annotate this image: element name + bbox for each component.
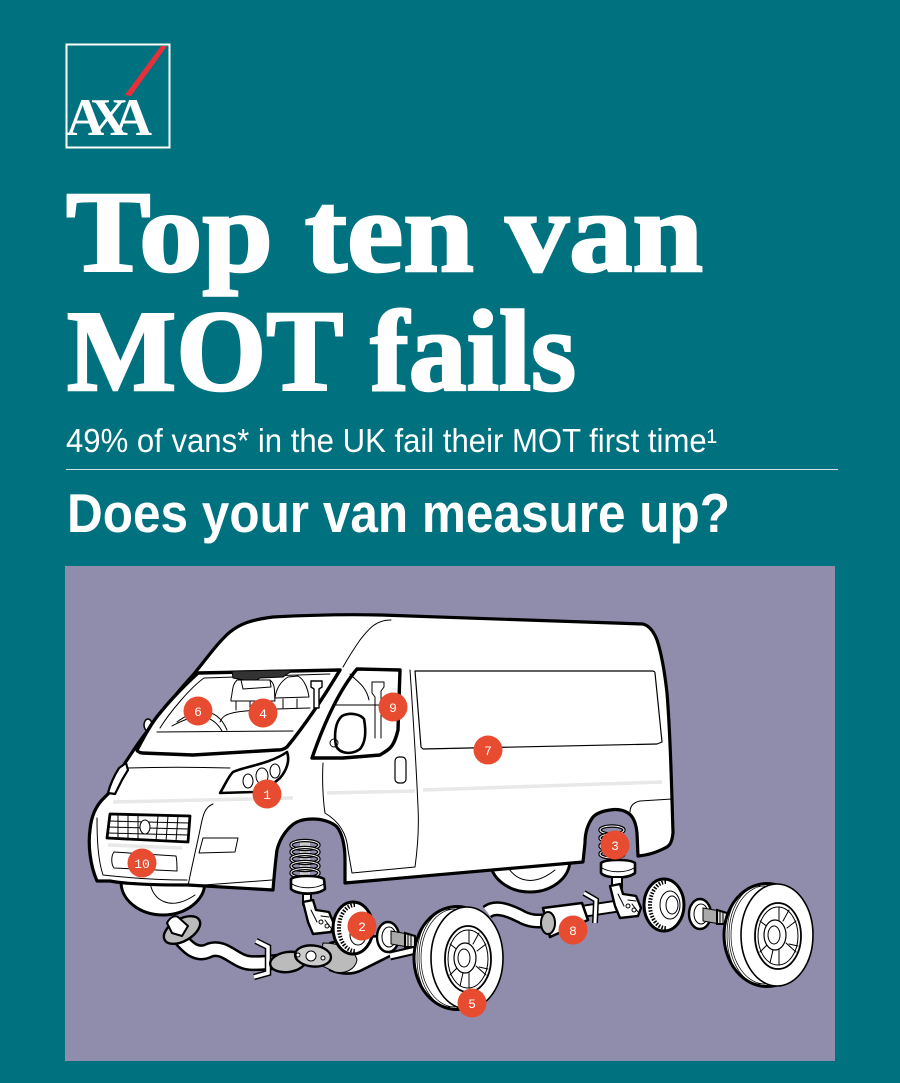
heading: does your van measure up: Does your van measure up?	[67, 482, 730, 544]
badge 8	[558, 916, 588, 944]
front suspension	[291, 840, 334, 934]
badge 9	[378, 692, 408, 722]
front hanger	[254, 941, 268, 977]
headlight	[220, 752, 288, 793]
badge 2	[348, 912, 376, 940]
side indicator	[108, 763, 128, 794]
badge 3: 3	[611, 839, 619, 854]
badge 8: 8	[569, 924, 577, 939]
catalytic converter	[330, 936, 392, 974]
front coil spring	[291, 840, 319, 878]
front pipe	[178, 936, 295, 963]
badge 10: 10	[134, 857, 150, 872]
rear suspension	[600, 826, 641, 918]
door lines	[323, 620, 418, 873]
rear bumper	[630, 799, 672, 812]
rear hub	[689, 899, 727, 929]
rear wheel of van	[490, 828, 570, 892]
title: MOT fails	[67, 288, 576, 416]
badge 6	[184, 696, 212, 726]
badge 4: 4	[259, 707, 267, 722]
rear pipe run	[487, 909, 548, 921]
front hub	[377, 922, 415, 952]
front road wheel	[414, 906, 503, 1010]
rub strip	[113, 782, 662, 802]
rear road wheel	[724, 884, 813, 986]
front brake disc	[333, 902, 373, 954]
subtitle: 49% of vans* in the UK fail their MOT first time¹	[66, 422, 717, 459]
cargo panel	[415, 671, 662, 749]
side window	[312, 669, 400, 758]
windscreen	[137, 670, 340, 755]
logo: AXA	[66, 44, 170, 148]
pipe flange	[159, 910, 205, 950]
lower intake	[112, 852, 177, 871]
badge 4	[248, 698, 278, 728]
silencer	[543, 903, 588, 937]
title: Top ten van	[66, 169, 703, 297]
badge 9: 9	[389, 701, 397, 716]
title	[66, 169, 703, 416]
badge 10	[128, 848, 156, 878]
hood line	[97, 767, 272, 886]
badge 7: 7	[484, 744, 492, 759]
badge 1: 1	[263, 788, 271, 803]
grille	[107, 814, 190, 842]
badge 5	[458, 988, 486, 1018]
rear hanger	[584, 893, 596, 923]
badge 6: 6	[194, 705, 202, 720]
panel: van illustration	[65, 566, 835, 1061]
badge 5: 5	[468, 997, 476, 1012]
van body	[89, 615, 673, 890]
front wheel of van	[121, 849, 205, 915]
number badges	[128, 692, 630, 1018]
badge 3	[600, 830, 630, 860]
badge 2: 2	[358, 920, 366, 935]
rear brake disc	[644, 879, 684, 931]
badge 1	[252, 780, 282, 808]
badge 7	[474, 736, 502, 764]
logo: AXA: AXA	[66, 89, 152, 147]
fog lamp panel	[199, 838, 238, 853]
door handle	[395, 757, 406, 783]
exhaust system	[159, 893, 618, 977]
door mirror	[144, 719, 152, 731]
